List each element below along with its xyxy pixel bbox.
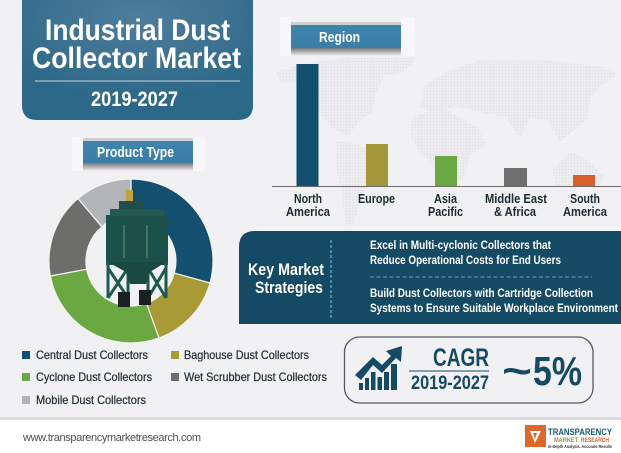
website url: www.transparencymarketresearch.com: [22, 432, 201, 444]
icon: rising chart: [355, 346, 402, 390]
segment: baghouse: [146, 273, 210, 338]
CAGR period: 2019-2027: [411, 373, 489, 394]
world map backdrop: [276, 58, 618, 225]
region labels: & Africa: [494, 204, 537, 219]
title years: 2019-2027: [91, 88, 178, 111]
bar: south america: [573, 175, 595, 186]
CAGR label: CAGR: [433, 344, 489, 372]
CAGR value: [502, 348, 582, 394]
strategy one: Excel in Multi-cyclonic Collectors that: [370, 240, 551, 252]
region labels: North: [294, 191, 322, 206]
title heading: Industrial Dust: [45, 14, 230, 47]
footer: [0, 417, 621, 453]
region tab: Region: [319, 30, 360, 46]
segment: mobile: [78, 179, 131, 227]
region labels: [286, 191, 608, 219]
segment: wet scrubber: [49, 198, 102, 276]
CAGR value: 5%: [533, 348, 582, 394]
bar: north america: [296, 64, 318, 186]
region labels: America: [286, 204, 331, 219]
title heading: [32, 14, 241, 75]
region tab: [280, 17, 415, 56]
legend: mobile: Mobile Dust Collectors: [36, 393, 146, 407]
region labels: Europe: [358, 191, 395, 206]
key strategies heading: Key Market: [248, 260, 324, 279]
key strategies heading: [248, 260, 324, 297]
title heading: Collector Market: [32, 42, 241, 75]
product type tab: Product Type: [97, 145, 174, 161]
strategy two: Build Dust Collectors with Cartridge Collection: [370, 288, 593, 300]
panel: CAGR: [344, 337, 593, 403]
logo: TRANSPARENCY: [548, 427, 612, 437]
bar: europe: [366, 144, 388, 186]
product type tab: [72, 137, 205, 171]
legend: central: Central Dust Collectors: [36, 348, 148, 362]
donut chart: product type share: [49, 179, 213, 343]
title panel: [22, 0, 253, 120]
bar: asia pacific: [435, 156, 457, 186]
legend: [22, 348, 327, 407]
legend: wet scrubber: Wet Scrubber Dust Collectors: [184, 370, 327, 384]
strategy one: [370, 240, 561, 267]
bar: middle east and africa: [504, 168, 527, 186]
panel: key market strategies: [239, 231, 621, 324]
logo: MARKET: [554, 438, 578, 444]
segment: central: [131, 179, 213, 283]
region labels: America: [563, 204, 608, 219]
legend: baghouse: Baghouse Dust Collectors: [184, 348, 309, 362]
CAGR value: ~: [502, 348, 532, 394]
segment: cyclone: [50, 269, 159, 343]
logo: RESEARCH: [581, 438, 609, 444]
icon: dust collector machine: [106, 190, 168, 307]
strategy one: Reduce Operational Costs for End Users: [370, 255, 561, 267]
bar chart: region: [272, 64, 621, 219]
logo: [525, 425, 612, 449]
legend: cyclone: Cyclone Dust Collectors: [36, 370, 152, 384]
region labels: Pacific: [428, 204, 463, 219]
region labels: South: [570, 191, 600, 206]
strategy two: [370, 288, 618, 315]
region labels: Asia: [434, 191, 458, 206]
region labels: Middle East: [485, 191, 548, 206]
key strategies heading: Strategies: [255, 278, 323, 297]
